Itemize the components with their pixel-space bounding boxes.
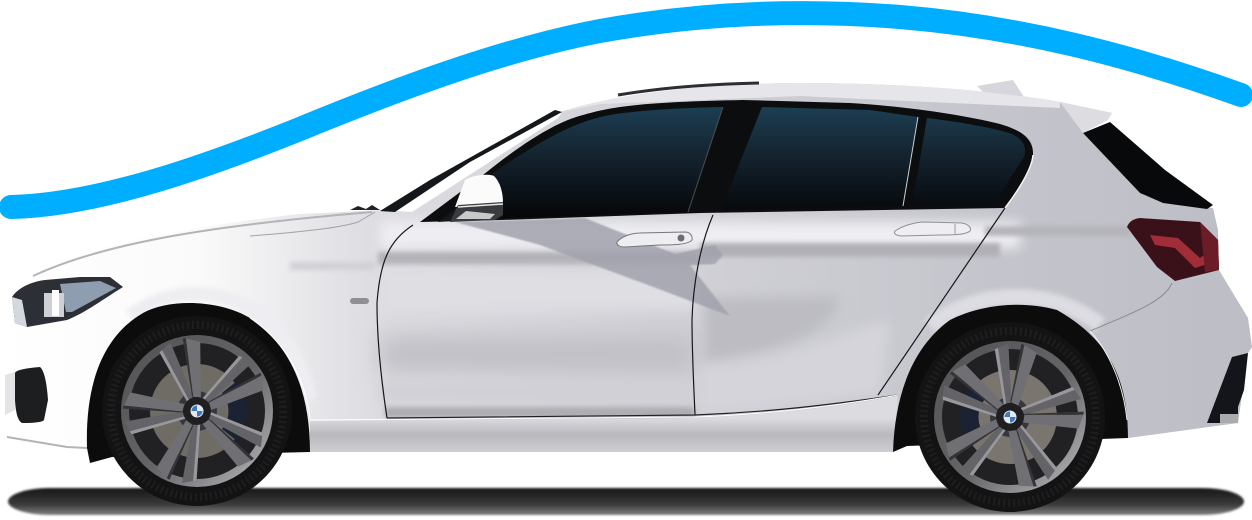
ground shadow bbox=[8, 488, 1244, 515]
tire bbox=[915, 322, 1105, 512]
spokes bbox=[936, 341, 1086, 493]
emblem bbox=[190, 404, 204, 418]
window: quarter bbox=[912, 118, 1025, 206]
roof rail bbox=[618, 83, 759, 95]
brake disc bbox=[963, 370, 1057, 464]
hood crease bbox=[33, 212, 372, 276]
side skirt bbox=[310, 396, 898, 452]
rear spoiler bbox=[1060, 102, 1112, 133]
window: rear door bbox=[721, 107, 918, 210]
rear wheel bbox=[915, 322, 1105, 512]
front wheel bbox=[102, 316, 292, 506]
roof fin antenna bbox=[977, 80, 1024, 97]
front bumper lip bbox=[7, 437, 87, 448]
rear window bbox=[1083, 122, 1213, 209]
side badge bbox=[350, 298, 369, 304]
hub bbox=[996, 403, 1024, 431]
window: front door bbox=[493, 107, 723, 218]
hub bbox=[183, 397, 211, 425]
wheel arch: rear bbox=[893, 305, 1128, 452]
rear diffuser and exhaust bbox=[1207, 353, 1248, 423]
airflow curve bbox=[11, 13, 1241, 207]
wheel arch: front bbox=[87, 303, 310, 463]
emblem bbox=[1004, 410, 1016, 424]
tire bbox=[102, 316, 292, 506]
car body shell bbox=[3, 83, 1252, 452]
brake caliper bbox=[222, 381, 247, 441]
front air intake bbox=[15, 367, 48, 423]
brake disc bbox=[150, 364, 244, 458]
window frame bbox=[420, 100, 1033, 222]
rim bbox=[934, 341, 1086, 493]
headlight bbox=[12, 277, 123, 327]
brake caliper bbox=[960, 387, 985, 447]
rim bbox=[121, 335, 273, 487]
body shading bbox=[130, 83, 1130, 418]
tail light bbox=[1127, 218, 1219, 281]
door handle: rear bbox=[894, 222, 971, 236]
spokes bbox=[122, 334, 270, 488]
mirror shadow on door bbox=[455, 218, 730, 316]
windshield strip bbox=[380, 112, 562, 212]
wing mirror bbox=[438, 175, 503, 222]
door handle: front bbox=[617, 232, 692, 247]
door shut lines bbox=[377, 208, 1172, 418]
